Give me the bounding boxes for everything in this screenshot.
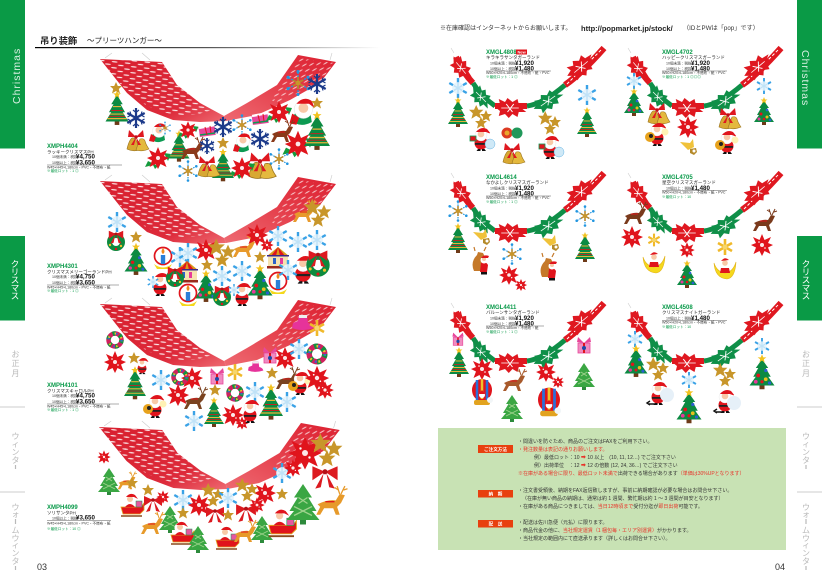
text: XMPH4301 — [47, 264, 119, 293]
right side nav: ウォームウィンター: ィ — [802, 541, 810, 550]
shipping notes: ・配送は佐川急便（元払）に限ります。 — [518, 519, 608, 526]
left side tab: クリスマス — [0, 236, 25, 320]
garland XMGL4508 — [623, 303, 781, 423]
text: XMGL4411: バルーンサンタガーランド — [486, 309, 540, 316]
text: XMGL4705 — [662, 175, 727, 199]
text: XMPH4301: 10個以上：税抜 — [52, 280, 78, 285]
garland XMGL4411 — [446, 303, 604, 422]
right side tab: クリスマス: マ — [802, 283, 810, 293]
label: ご注文方法: ご注文方法 — [484, 446, 507, 453]
text: XMGL4614: ¥1,920 — [515, 185, 534, 192]
right side nav: お正月: お — [802, 350, 810, 359]
label: 配送: 配 送 — [489, 521, 503, 528]
left side nav: お正月: 月 — [12, 369, 20, 378]
left side nav: ウォームウィンター: ウ — [12, 503, 20, 512]
text: XMPH4404: W45×H45×L180cm・PVC・不燃布・紙 — [47, 164, 111, 169]
right side nav: お正月: 正 — [802, 359, 810, 368]
text: XMPH4099: XMPH4099 — [47, 505, 78, 511]
heading: 吊り装飾: ～プリーツハンガー～ — [87, 35, 162, 45]
left side nav: ウォームウィンター — [12, 503, 20, 570]
stock note: ※在庫確認はインターネットからお願いします。 — [440, 24, 571, 32]
order notes: 例）出荷単位 ：12 ➡ 12 の倍数 (12, 24, 36…) でご注文下さい — [534, 462, 678, 469]
text: XMPH4301: XMPH4301 — [47, 264, 78, 270]
garland XMGL4614 — [446, 173, 604, 291]
order notes: ・間違いを防ぐため、商品のご注文はFAXをご利用下さい。 — [518, 438, 652, 445]
text: XMGL4411 — [486, 305, 544, 334]
right side nav: ウォームウィンター: ウ — [802, 503, 810, 512]
left side nav: お正月 — [12, 350, 20, 378]
stock note: http://popmarket.jp/stock/ — [581, 24, 674, 33]
text: XMPH4101: ¥4,750 — [76, 392, 95, 400]
text: XMPH4404: ※最低ロット：1 ◎ — [47, 168, 79, 173]
right side nav: ウォームウィンター: ウ — [802, 534, 810, 543]
label: 納期: 納 期 — [489, 491, 503, 498]
text: XMPH4301: ¥3,650 — [76, 280, 95, 286]
text: XMPH4101 — [47, 383, 119, 412]
left side nav: ウィンター: ウ — [12, 432, 20, 441]
text: XMPH4099: 10個以上：税抜 — [52, 516, 78, 520]
text: XMGL4614: W50×H20×L180cm・不燃布・紙・PVC — [486, 195, 550, 200]
text: XMGL4808: New — [518, 50, 527, 54]
left side nav: ウォームウィンター: ウ — [12, 534, 20, 543]
text: XMPH4101: クリスマスキャロルPH — [47, 388, 94, 394]
right side tab: クリスマス — [797, 236, 822, 320]
text: XMGL4702: 10個未満：税抜 — [666, 60, 692, 66]
text: XMPH4099: ※最低ロット：10 ◎ — [47, 526, 81, 531]
left side tab: Christmas — [0, 0, 25, 148]
text: XMPH4404: 10個以上：税抜 — [52, 160, 78, 165]
left side nav: ウィンター: ィ — [12, 440, 20, 449]
text: XMGL4702: ¥1,480 — [691, 66, 710, 72]
text: XMPH4101: ¥3,650 — [76, 398, 95, 406]
text: XMGL4702: ※最低ロット：1 ◎◎◎ — [662, 74, 701, 79]
product: sleigh Santa pleated hanger — [97, 421, 348, 553]
right side nav: ウィンター: ィ — [802, 440, 810, 449]
right side nav: ウィンター — [802, 432, 810, 469]
delivery time notes: （在庫が無い商品の納期は、通常は約 1 週間、繁忙期は約 1 ～ 3 週間が目安となります） — [522, 495, 724, 502]
text: XMGL4808: 10個以上：税抜 — [490, 66, 516, 71]
left side nav: ウォームウィンター: ン — [12, 549, 20, 558]
text: XMGL4614: 10個以上：税抜 — [490, 191, 516, 196]
page number 03: 03 — [37, 562, 47, 572]
left side tab: クリスマス: マ — [11, 283, 19, 293]
text: XMGL4705: XMGL4705 — [662, 175, 693, 181]
left side tab: クリスマス: ス — [11, 291, 19, 301]
text: XMGL4702: XMGL4702 — [662, 50, 693, 56]
right side tab: クリスマス: ス — [802, 291, 810, 301]
left side nav: ウォームウィンター: ム — [12, 526, 20, 535]
right side nav: ウォームウィンター — [802, 503, 810, 570]
text: XMGL4705: ¥1,480 — [691, 185, 710, 192]
garland XMGL4702 — [623, 48, 781, 155]
right side nav: ウォームウィンター: タ — [802, 557, 810, 566]
text: XMGL4508: クリスマスナイトガーランド — [662, 309, 720, 316]
left side nav: お正月: 正 — [12, 359, 20, 368]
label: 配送 — [478, 520, 513, 528]
text: XMGL4614 — [486, 175, 551, 204]
shipping notes: ・当社規定の範囲内にて直送承ります（詳しくはお問合せ下さい）。 — [518, 535, 671, 542]
text: XMPH4301: クリスマスメリーゴーランドPH — [47, 268, 112, 276]
text: XMPH4404: XMPH4404 — [47, 144, 78, 150]
shipping notes — [518, 519, 692, 542]
text: XMPH4099 — [47, 505, 111, 531]
page number 04: 04 — [775, 562, 785, 572]
text: XMPH4099: W45×H45×L180cm・PVC・不燃布・紙 — [47, 520, 111, 526]
left side nav: ウィンター — [12, 432, 20, 469]
text: XMGL4808 — [486, 50, 551, 79]
text: XMGL4508: 10個以上：税抜 — [666, 316, 692, 320]
right side nav: ウォームウィンター: ム — [802, 526, 810, 535]
text: XMGL4808: 10個未満：税抜 — [490, 60, 516, 66]
text: XMGL4614: 10個未満：税抜 — [490, 186, 516, 190]
text: XMPH4404: ラッキークリスマスPH — [47, 150, 94, 156]
left side nav: ウォームウィンター: タ — [12, 557, 20, 566]
garland XMGL4705 — [621, 173, 781, 288]
text: XMGL4411: ※最低ロット：1 ◎ — [486, 329, 518, 334]
left side nav: ウィンター: タ — [12, 456, 20, 465]
text: XMGL4808: XMGL4808 — [486, 50, 517, 56]
text: XMGL4411: 10個未満：税抜 — [490, 316, 516, 320]
text: XMPH4101: W45×H45×L180cm・PVC・不燃布・紙 — [47, 403, 111, 408]
right side nav: ウォームウィンター: ォ — [802, 510, 810, 519]
shipping notes: ・商品代金の他に、当社規定運賃（1 梱包毎・エリア別運賃）がかかります。 — [518, 527, 692, 534]
left side nav: ウィンター: ン — [12, 448, 20, 457]
text: XMPH4301: ※最低ロット：1 ◎ — [47, 288, 79, 293]
label: ご注文方法 — [478, 445, 513, 453]
text: XMGL4808: W50×H20×L180cm・不燃布・紙・PVC — [486, 70, 550, 75]
order notes — [518, 438, 745, 477]
text: XMPH4301: ¥4,750 — [76, 274, 95, 280]
text: XMGL4508: XMGL4508 — [662, 305, 693, 311]
product: Christmas carol pleated hanger — [100, 298, 336, 431]
text: XMPH4101: XMPH4101 — [47, 383, 78, 389]
right side nav: お正月: 月 — [802, 369, 810, 378]
text: XMGL4808: ¥1,480 — [515, 66, 534, 72]
heading: 吊り装飾: 吊り装飾 — [40, 35, 77, 46]
text: XMGL4808: キラキラサンタガーランド — [486, 54, 540, 61]
right side nav: ウィンター: ン — [802, 448, 810, 457]
text: XMGL4702: W50×H20×L180cm・不燃布・紙・PVC — [662, 70, 726, 75]
text: XMPH4301: 10個未満：税抜 — [52, 274, 78, 279]
text: XMGL4702 — [662, 50, 727, 79]
text: XMGL4508: W50×H20×L180cm・不燃布・紙・PVC — [662, 320, 726, 324]
text: XMPH4404: ¥4,750 — [76, 154, 95, 160]
text: XMGL4808: ¥1,920 — [515, 60, 534, 67]
text: XMPH4301: W45×H45×L180cm・PVC・不燃布・紙 — [47, 284, 111, 289]
left side nav: ウォームウィンター: ィ — [12, 541, 20, 550]
text: XMGL4702: ハッピークリスマスガーランド — [662, 54, 725, 61]
stock note: （IDとPWは「pop」です） — [683, 25, 759, 32]
right side nav: ウィンター: タ — [802, 456, 810, 465]
right side nav: ウォームウィンター: ン — [802, 549, 810, 558]
right side tab: クリスマス: ク — [802, 259, 810, 269]
product: lucky Christmas pleated hanger — [100, 53, 336, 182]
text: XMPH4404: 10個未満：税抜 — [52, 154, 78, 159]
text: XMGL4705: 10個以上：税抜 — [666, 186, 692, 190]
left side tab: クリスマス: ク — [11, 259, 19, 269]
delivery time notes: ・在庫がある商品につきましては、当日12時頃まで受付分迄が即日出荷可能です。 — [518, 503, 703, 510]
left side tab: Christmas: Christmas — [11, 48, 23, 104]
text: XMGL4702: 10個以上：税抜 — [666, 66, 692, 71]
delivery time notes — [518, 487, 732, 510]
text: XMPH4099: ¥3,650 — [76, 514, 95, 522]
text: XMGL4508 — [662, 305, 727, 329]
text: XMPH4404 — [47, 144, 122, 173]
text: XMGL4411: W50×H20×L180cm・不燃布・紙 — [486, 325, 539, 330]
text: XMGL4508: ¥1,480 — [691, 315, 710, 322]
heading: 吊り装飾 — [35, 35, 380, 48]
text: XMGL4614: XMGL4614 — [486, 175, 517, 181]
right side nav: ウィンター: ウ — [802, 432, 810, 441]
text: XMGL4808: ※最低ロット：1 ◎ — [486, 74, 518, 79]
right side tab: クリスマス: リ — [802, 267, 810, 277]
left side tab: クリスマス: リ — [11, 267, 19, 277]
text: XMPH4101: ※最低ロット：1 ◎ — [47, 407, 79, 412]
order notes: ※在庫がある場合に限り、最低ロット未満で出荷できる場合があります（単価は30%UPとなります） — [518, 470, 745, 477]
text: XMGL4411: XMGL4411 — [486, 305, 517, 311]
text: XMPH4101: 10個以上：税抜 — [52, 399, 78, 404]
left side nav: お正月: お — [12, 350, 20, 359]
product: merry-go-round pleated hanger — [100, 175, 336, 306]
text: XMGL4705: ※最低ロット：10 — [662, 194, 691, 199]
right side tab: Christmas: Christmas — [799, 50, 811, 106]
text: XMGL4614: ※最低ロット：1 ◎ — [486, 199, 518, 204]
right side nav: お正月 — [802, 350, 810, 378]
text: XMGL4411: ¥1,920 — [515, 315, 534, 322]
text: XMGL4614: ¥1,480 — [515, 190, 534, 198]
order notes: ・発注数量は表記の通りお願いします。 — [518, 446, 608, 453]
text: XMGL4411: 10個以上：税抜 — [490, 321, 516, 326]
right side tab: クリスマス: ス — [802, 275, 810, 285]
text: XMGL4702: ¥1,920 — [691, 60, 710, 67]
left side nav: ウォームウィンター: ォ — [12, 510, 20, 519]
text: XMPH4101: 10個未満：税抜 — [52, 393, 78, 398]
text: XMGL4705: W50×H20×L180cm・不燃布・紙・PVC — [662, 190, 726, 194]
text: XMGL4411: ¥1,480 — [515, 320, 534, 328]
garland XMGL4808 — [446, 48, 604, 164]
order notes: 例）最低ロット：10 ➡ 10 以上 (10, 11, 12…) でご注文下さい — [534, 454, 676, 461]
text: XMPH4099: ソリサンタPH — [47, 510, 76, 516]
delivery time notes: ・注文書受領後、納期をFAX返信致しますが、事前に納期確認が必要な場合はお問合せ下さい。 — [518, 487, 732, 494]
left side tab: クリスマス: ス — [11, 275, 19, 285]
label: 納期 — [478, 490, 513, 498]
panel: ordering information — [438, 428, 786, 550]
text: XMGL4614: なかよしクリスマスガーランド — [486, 179, 549, 186]
text: XMGL4508: ※最低ロット：10 — [662, 324, 691, 329]
text: XMPH4404: ¥3,650 — [76, 160, 95, 166]
stock note — [440, 24, 759, 33]
text: XMGL4705: 星空クリスマスガーランド — [662, 179, 716, 186]
right side tab: Christmas — [797, 0, 822, 148]
